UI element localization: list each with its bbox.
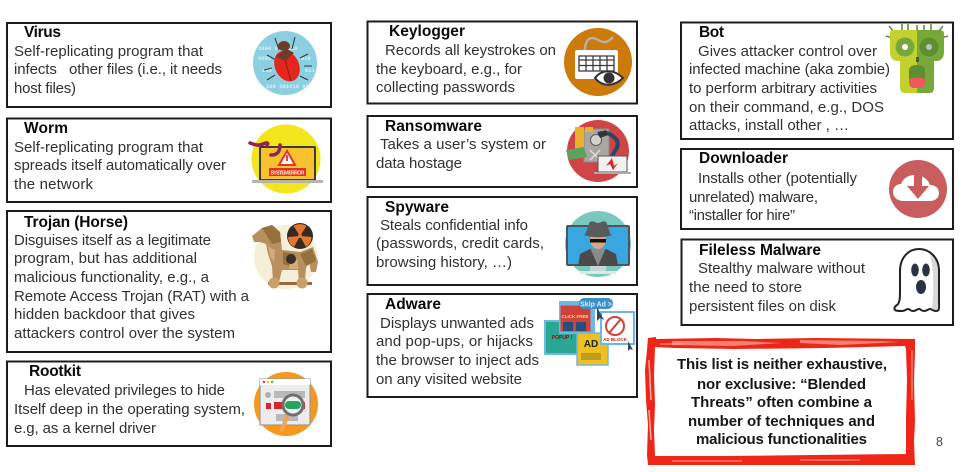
callout text — [677, 356, 887, 448]
description: Virus: host files) — [14, 80, 76, 97]
icon: Trojan horse with radiation symbol — [252, 223, 318, 289]
icon: stacked ad pop-ups: AD BLOCK — [603, 337, 628, 342]
description: Keylogger: Records all keystrokes on — [385, 42, 556, 59]
callout text: nor exclusive: “Blended — [697, 376, 866, 393]
icon: stacked ad pop-ups: Skip Ad > — [580, 302, 612, 308]
description: Worm: Self-replicating program that — [14, 139, 204, 156]
icon: ghost — [894, 249, 939, 311]
icon: bug on binary digits: 1000 01 1110 — [258, 45, 298, 52]
description: Virus — [14, 43, 222, 97]
description: Spyware — [376, 217, 544, 271]
icon: safe, coins, money and hooked laptop — [566, 120, 631, 182]
description: Trojan (Horse): malicious functionality, e.g., a — [14, 269, 210, 286]
description: Bot: attacks, install other , … — [689, 117, 849, 134]
description: Ransomware: data hostage — [376, 155, 462, 172]
description: Bot: to perform arbitrary activities — [689, 80, 877, 97]
icon: cloud download — [889, 160, 947, 218]
icon: stacked ad pop-ups: CLICK FREE — [562, 314, 588, 319]
description: Downloader — [689, 170, 858, 224]
description: Trojan (Horse): attackers control over the system — [14, 325, 235, 342]
description: Adware — [376, 315, 539, 388]
heading: Ransomware: Ransomware — [385, 118, 482, 135]
icon: stacked ad pop-ups — [545, 298, 634, 365]
description: Worm — [14, 139, 226, 193]
heading: Adware: Adware — [385, 296, 441, 313]
description: Rootkit: Itself deep in the operating system, — [14, 401, 245, 418]
heading: Keylogger: Keylogger — [389, 23, 465, 40]
description: Virus: infects other files (i.e., it needs — [14, 61, 222, 78]
description: Downloader: “installer for hire” — [689, 207, 795, 224]
description: Adware: on any visited website — [376, 371, 522, 388]
heading: Fileless Malware: Fileless Malware — [699, 242, 821, 259]
page number: 8 — [936, 435, 943, 449]
icon: bug on binary digits — [253, 31, 317, 95]
panel: Fileless Malware — [682, 240, 953, 325]
heading: Downloader: Downloader — [699, 150, 788, 167]
icon: bug on binary digits: 110 011 — [262, 67, 316, 74]
description: Fileless Malware: the need to store — [689, 279, 802, 296]
panel: Keylogger — [368, 22, 637, 104]
description: Spyware: browsing history, …) — [376, 254, 512, 271]
icon: bug on binary digits: 0001 010 — [258, 55, 311, 62]
description: Adware: Displays unwanted ads — [380, 315, 534, 332]
description: Keylogger: collecting passwords — [376, 79, 515, 96]
icon: spy in monitor — [565, 211, 631, 277]
description: Trojan (Horse) — [14, 232, 250, 342]
panel: Worm — [7, 118, 331, 202]
heading: Worm: Worm — [24, 120, 68, 137]
heading: Trojan (Horse): Trojan (Horse) — [24, 214, 128, 231]
description: Spyware: (passwords, credit cards, — [376, 235, 544, 252]
description: Keylogger: the keyboard, e.g., for — [376, 61, 522, 78]
callout text: number of techniques and — [688, 413, 875, 430]
heading: Virus: Virus — [24, 24, 61, 41]
callout: blended threats note in red frame — [645, 337, 915, 465]
description: Trojan (Horse): Remote Access Trojan (RAT) with a — [14, 288, 250, 305]
description: Downloader: Installs other (potentially — [698, 170, 858, 187]
icon: stacked ad pop-ups: POPUP ! — [552, 335, 573, 341]
description: Trojan (Horse): Disguises itself as a legitimate — [14, 232, 211, 249]
description: Spyware: Steals confidential info — [380, 217, 528, 234]
icon: bug on binary digits: 100 001010 00 — [266, 83, 309, 90]
icon: worm on laptop with system error — [250, 124, 323, 194]
description: Keylogger — [376, 42, 556, 96]
panel: Trojan (Horse) — [7, 211, 331, 352]
panel: Rootkit — [7, 362, 331, 446]
icon: stacked ad pop-ups: AD — [584, 339, 598, 350]
panel: Downloader — [681, 149, 953, 229]
description: Bot: Gives attacker control over — [698, 43, 877, 60]
callout text: malicious functionalities — [696, 431, 867, 448]
description: Rootkit: e.g, as a kernel driver — [14, 420, 156, 437]
description: Ransomware: Takes a user’s system or — [380, 136, 546, 153]
description: Bot: on their command, e.g., DOS — [689, 99, 884, 116]
description: Ransomware — [376, 136, 546, 172]
panel: Ransomware — [368, 116, 637, 187]
heading: Rootkit: Rootkit — [29, 363, 81, 380]
description: Downloader: unrelated) malware, — [689, 189, 818, 206]
panel: Spyware — [368, 197, 637, 285]
description: Worm: the network — [14, 176, 94, 193]
callout text: Threats” often combine a — [691, 394, 873, 411]
description: Fileless Malware: persistent files on disk — [689, 298, 836, 315]
icon: zombie head — [886, 24, 948, 93]
description: Adware: and pop-ups, or hijacks — [376, 333, 533, 350]
panel: Adware — [368, 294, 637, 397]
description: Virus: Self-replicating program that — [14, 43, 204, 60]
heading: Bot: Bot — [699, 24, 724, 41]
icon: worm on laptop with system error: SYSTEM ERROR — [270, 170, 305, 176]
description: Fileless Malware — [689, 260, 866, 315]
description: Bot — [689, 43, 890, 134]
panel: Bot — [681, 22, 953, 139]
description: Rootkit — [14, 382, 245, 437]
icon: keyboard and eye — [564, 28, 632, 96]
description: Worm: spreads itself automatically over — [14, 157, 226, 174]
heading: Spyware: Spyware — [385, 199, 449, 216]
description: Trojan (Horse): program, but has additional — [14, 250, 197, 267]
callout text: This list is neither exhaustive, — [677, 356, 887, 373]
description: Adware: the browser to inject ads — [376, 352, 539, 369]
description: Bot: infected machine (aka zombie) — [689, 61, 890, 78]
description: Rootkit: Has elevated privileges to hide — [24, 382, 225, 399]
description: Fileless Malware: Stealthy malware without — [698, 260, 866, 277]
description: Trojan (Horse): hidden backdoor that gives — [14, 306, 195, 323]
panel: Virus — [7, 23, 331, 107]
frame: rough red border — [645, 337, 915, 465]
icon: login window under magnifier — [254, 372, 318, 436]
